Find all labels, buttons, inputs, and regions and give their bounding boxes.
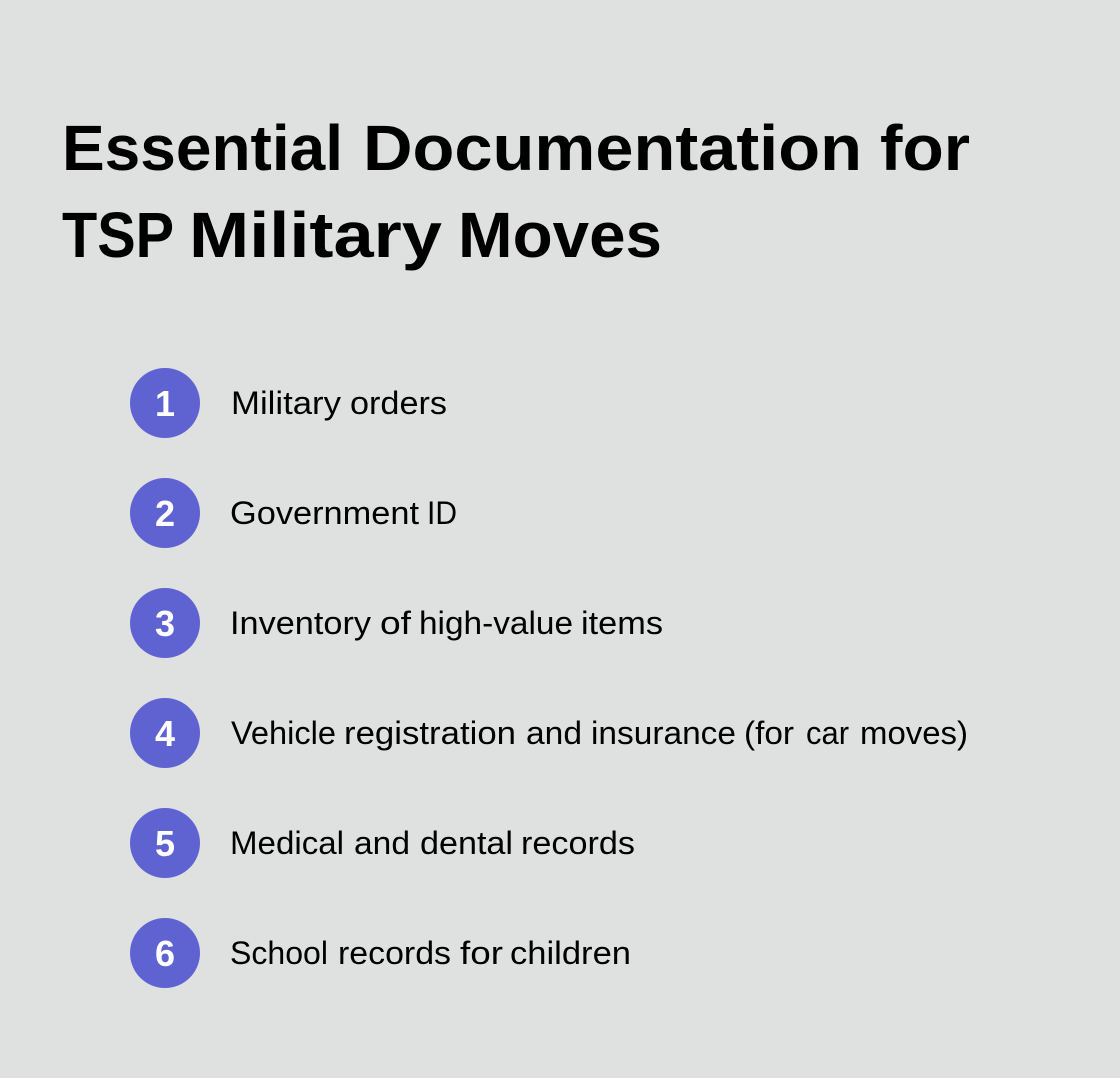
item 6: School records for children: School bbox=[230, 935, 328, 971]
title: for bbox=[880, 112, 970, 184]
item 6: School records for children: records bbox=[338, 935, 451, 971]
item 1: Military orders bbox=[130, 368, 447, 438]
item 3: Inventory of high-value items bbox=[130, 588, 663, 658]
item 4: Vehicle registration and insurance: registration bbox=[344, 715, 516, 751]
item 6: School records for children: 6 bbox=[155, 933, 175, 974]
item 5: Medical and dental records bbox=[130, 808, 635, 878]
item 4: Vehicle registration and insurance: car bbox=[806, 715, 849, 751]
title: Moves bbox=[458, 199, 662, 271]
title bbox=[62, 112, 970, 271]
item 3: Inventory of high-value items: Inventory bbox=[230, 605, 371, 641]
item 4: Vehicle registration and insurance: moves) bbox=[860, 715, 968, 751]
item 4: Vehicle registration and insurance: insurance bbox=[591, 715, 736, 751]
title: Essential bbox=[62, 112, 343, 184]
title: Military bbox=[189, 199, 442, 271]
item 2: Government ID: ID bbox=[427, 495, 457, 531]
item 6: School records for children: children bbox=[510, 935, 631, 971]
item 5: Medical and dental records: and bbox=[354, 825, 410, 861]
item 1: Military orders: Military bbox=[231, 385, 341, 421]
item 5: Medical and dental records: 5 bbox=[155, 823, 175, 864]
item 3: Inventory of high-value items: of bbox=[380, 605, 411, 641]
item 5: Medical and dental records: Medical bbox=[230, 825, 344, 861]
numbered list bbox=[130, 368, 968, 988]
item 3: Inventory of high-value items: 3 bbox=[155, 603, 175, 644]
item 5: Medical and dental records: dental bbox=[420, 825, 513, 861]
item 1: Military orders: orders bbox=[350, 385, 447, 421]
item 2: Government ID: 2 bbox=[155, 493, 175, 534]
title: Documentation bbox=[363, 112, 862, 184]
item 6: School records for children bbox=[130, 918, 631, 988]
item 4: Vehicle registration and insurance: Vehicle bbox=[231, 715, 336, 751]
item 5: Medical and dental records: records bbox=[521, 825, 635, 861]
item 2: Government ID: Government bbox=[230, 495, 419, 531]
item 4: Vehicle registration and insurance: 4 bbox=[155, 713, 175, 754]
item 6: School records for children: for bbox=[460, 935, 503, 971]
item 4: Vehicle registration and insurance: (for bbox=[744, 715, 794, 751]
item 3: Inventory of high-value items: high-value bbox=[419, 605, 573, 641]
item 4: Vehicle registration and insurance bbox=[130, 698, 968, 768]
title: TSP bbox=[62, 199, 173, 271]
item 3: Inventory of high-value items: items bbox=[581, 605, 663, 641]
item 1: Military orders: 1 bbox=[155, 383, 175, 424]
item 4: Vehicle registration and insurance: and bbox=[526, 715, 582, 751]
item 2: Government ID bbox=[130, 478, 457, 548]
